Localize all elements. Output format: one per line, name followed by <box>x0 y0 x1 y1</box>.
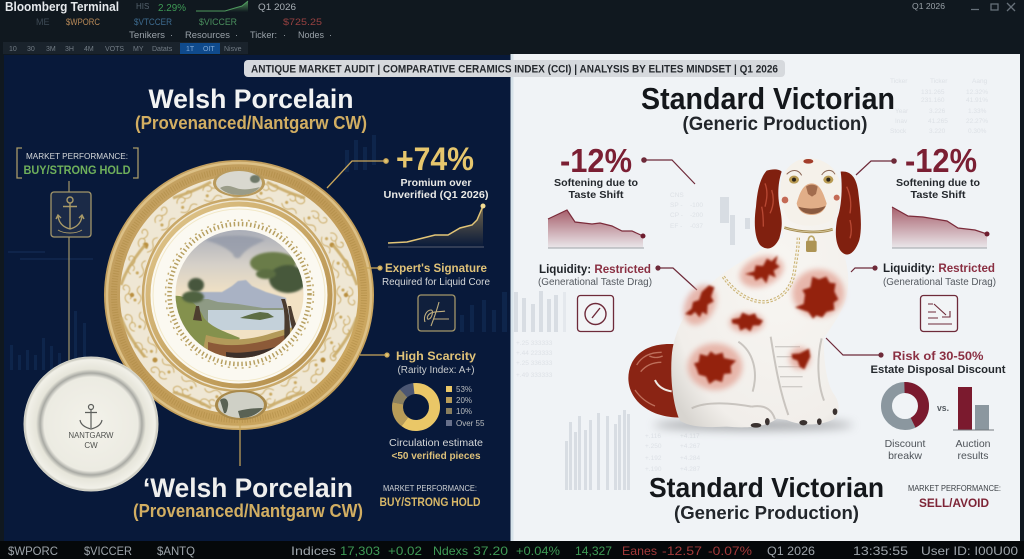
top bar: window title and tickers: Q1 2026 <box>258 2 296 13</box>
red patches <box>685 255 838 384</box>
top bar: window title and tickers: $VTCCER <box>134 17 172 27</box>
heading: Welsh Porcelain lower: (Provenanced/Nantgarw CW) <box>133 501 363 521</box>
bottom ticker bar: Ndexs <box>433 544 468 558</box>
donut chart: discount breakdown <box>886 388 924 424</box>
top bar: window title and tickers: · <box>170 30 173 40</box>
collar and padlock <box>784 228 833 232</box>
faint data table: EF - <box>670 223 682 230</box>
text: Expert's Signature <box>382 263 490 288</box>
bottom ticker bar: Q1 2026 <box>767 544 815 558</box>
faint data table: 41.265 <box>928 118 948 125</box>
donut legend: Over 55 <box>456 419 485 428</box>
market performance: buy lower: BUY/STRONG HOLD <box>380 495 481 509</box>
top bar: window title and tickers: Ticker: <box>250 30 277 40</box>
top bar: window title and tickers: 2.29% <box>158 3 186 14</box>
donut legend <box>446 385 485 428</box>
faint data table: Aang <box>972 78 988 85</box>
donut legend: 20% <box>456 396 472 405</box>
bottom ticker bar: -12.57 <box>662 544 702 558</box>
faint data table: +.190 <box>645 466 662 473</box>
connectors: dog left <box>642 158 697 290</box>
market performance box: buy: MARKET PERFORMANCE: <box>26 151 128 161</box>
faint data table: +.49 333333 <box>516 372 553 379</box>
stat: +74% premium: +74% <box>396 141 474 177</box>
top bar: window title and tickers: · <box>329 30 332 40</box>
tab row: OIT <box>203 46 215 53</box>
tab row: 3M <box>46 46 56 53</box>
icon: anchor <box>51 192 91 237</box>
bottom ticker bar: 17,303 <box>340 544 380 558</box>
tab row: Datats <box>152 46 173 53</box>
text: circulation estimate: Circulation estimate <box>389 437 483 449</box>
faint data table: +.44 223333 <box>516 350 553 357</box>
stat: -12% right: Taste Shift <box>910 189 966 201</box>
bottom ticker bar: User ID: I00U00 <box>921 544 1018 558</box>
text: risk of discount: Risk of 30-50% <box>892 349 984 363</box>
faint data table: +.25 336333 <box>516 360 553 367</box>
top bar: window title and tickers: $VICCER <box>199 17 237 27</box>
faint data table: +4.284 <box>680 455 700 462</box>
top bar: window title and tickers: · <box>283 30 286 40</box>
connector: plate to heading <box>239 421 241 466</box>
faint data table: SP - <box>670 202 683 209</box>
stat: -12% right: -12% <box>905 142 977 179</box>
head <box>780 158 840 226</box>
donut legend: 10% <box>456 407 472 416</box>
heading: Welsh Porcelain: Welsh Porcelain <box>148 84 354 114</box>
bottom ticker bar: $VICCER <box>84 544 132 558</box>
faint data table: +4.287 <box>680 466 700 473</box>
connectors: dog right <box>826 159 896 357</box>
text: risk of discount <box>870 349 1006 376</box>
heading: Welsh Porcelain lower: ‘Welsh Porcelain <box>143 473 353 503</box>
icon: anchor mark <box>80 404 102 429</box>
faint data table: 0.30% <box>968 128 987 135</box>
text: High Scarcity: (Rarity Index: A+) <box>398 365 474 376</box>
muzzle <box>782 183 840 215</box>
tail <box>628 344 683 418</box>
plate: Nantgarw porcelain <box>104 160 374 430</box>
faint data table: +.116 <box>645 433 661 440</box>
stat: -12% left: Taste Shift <box>568 189 624 201</box>
market performance: buy lower <box>380 483 481 509</box>
bottom ticker bar: Eanes <box>622 544 657 558</box>
panel: Standard Victorian <box>512 54 1020 541</box>
faint data table: Ticker <box>930 78 948 85</box>
faint data table: Ticker <box>890 78 908 85</box>
labels: donut and bars: Auction <box>955 438 991 450</box>
faint data table: 12.32% <box>966 89 988 96</box>
outer gold band <box>104 160 374 430</box>
text: High Scarcity: High Scarcity <box>396 349 476 363</box>
text: Expert's Signature: Expert's Signature <box>385 263 487 275</box>
faint data table: +.250 <box>645 443 662 450</box>
plate back: anchor mark: CW <box>84 441 98 450</box>
faint data table: Stock <box>890 128 907 135</box>
bar chart: auction results <box>953 387 994 430</box>
title strip: ANTIQUE MARKET AUDIT | COMPARATIVE CERAMICS INDEX (CCI) | ANALYSIS BY ELITES MINDSET | Q1 2026 <box>251 64 778 76</box>
window title: Bloomberg Terminal <box>5 0 119 14</box>
heading: Welsh Porcelain: (Provenanced/Nantgarw CW) <box>135 113 367 133</box>
dog figurine <box>628 158 861 430</box>
tab row <box>3 42 248 54</box>
gilt chain <box>723 237 798 302</box>
labels: donut and bars: breakw <box>888 450 922 462</box>
top bar: window title and tickers: ME <box>36 17 50 27</box>
faint data table: 22.27% <box>966 118 988 125</box>
stat: +74% premium: Promium over <box>400 177 472 189</box>
lace border <box>120 176 358 414</box>
bottom ticker bar: +0.04% <box>516 544 560 558</box>
area chart: softening right <box>892 207 990 248</box>
labels: donut and bars: results <box>958 450 988 462</box>
bottom ticker bar: $WPORC <box>8 544 58 558</box>
heading: Standard Victorian: Standard Victorian <box>641 81 895 116</box>
text: circulation estimate <box>389 437 483 462</box>
market performance: sell: MARKET PERFORMANCE: <box>908 484 1001 493</box>
tab row: 10 <box>9 46 17 53</box>
text: liquidity left: Liquidity: Restricted <box>539 264 651 276</box>
faint data table: 231.160 <box>921 97 945 104</box>
heading: Welsh Porcelain lower <box>133 473 363 521</box>
sparkline <box>196 1 248 12</box>
faint data table: +4.117 <box>680 433 700 440</box>
labels: donut and bars <box>885 438 991 462</box>
faint data table: -200 <box>690 212 703 219</box>
bottom ticker bar <box>0 541 1024 559</box>
market performance box: buy <box>17 148 138 178</box>
top bar: window title and tickers: Nodes <box>298 30 324 40</box>
tab row: 3H <box>65 46 74 53</box>
line chart: premium rise <box>388 204 486 247</box>
bottom ticker bar: 37.20 <box>473 544 508 558</box>
faint data table: 41.91% <box>966 97 988 104</box>
window controls <box>971 3 1015 11</box>
label: vs.: vs. <box>937 403 949 413</box>
market performance: buy lower: MARKET PERFORMANCE: <box>383 483 477 493</box>
top cartouche <box>213 169 265 197</box>
donut chart: rarity <box>396 387 436 427</box>
faint data table: +.192 <box>645 455 662 462</box>
heading: Standard Victorian <box>641 81 895 135</box>
market performance: sell <box>908 484 1001 510</box>
faint data table: +4.267 <box>680 443 700 450</box>
stat: +74% premium <box>384 141 488 201</box>
stat: -12% left <box>554 142 638 201</box>
top bar: window title and tickers: HIS <box>136 2 149 11</box>
labels: donut and bars: Discount <box>885 438 926 450</box>
stat: -12% left: Softening due to <box>554 177 638 189</box>
title strip <box>244 60 785 77</box>
painted landscape <box>176 230 304 358</box>
text: liquidity right: Liquidity: Restricted <box>883 263 995 275</box>
top bar: window title and tickers: $WPORC <box>66 17 100 27</box>
text: liquidity right: (Generational Taste Drag) <box>883 277 996 288</box>
text: circulation estimate: <50 verified pieces <box>392 450 481 462</box>
right ear <box>836 172 861 255</box>
faint data table: Year <box>895 108 909 115</box>
faint data table: -037 <box>690 223 703 230</box>
beaded ring <box>170 224 310 364</box>
text: liquidity left: (Generational Taste Drag) <box>538 277 652 288</box>
plate back: anchor mark: NANTGARW <box>68 431 114 440</box>
heading: Welsh Porcelain <box>135 84 367 133</box>
connector line: anchor column <box>68 181 70 362</box>
top bar: window title and tickers <box>3 0 1015 54</box>
bottom cartouche <box>215 390 267 420</box>
text: risk of discount: Estate Disposal Discount <box>870 364 1006 376</box>
bottom ticker bar: $ANTQ <box>157 544 195 558</box>
gilt ring <box>143 199 335 391</box>
connector: +74% <box>327 159 388 188</box>
bottom ticker bar: 13:35:55 <box>853 544 908 558</box>
faint data table: 131.265 <box>921 89 945 96</box>
bottom ticker bar: Indices <box>291 544 336 558</box>
faint data table: 1.33% <box>968 108 987 115</box>
faint background bars <box>514 197 750 490</box>
top bar: window title and tickers: Tenikers <box>129 30 166 40</box>
connector: signature <box>362 266 382 270</box>
faint data table <box>516 78 988 473</box>
top bar: window title and tickers: Q1 2026 <box>912 1 945 11</box>
tab row: MY <box>133 46 144 53</box>
heading: Standard Victorian lower: (Generic Production) <box>674 503 859 523</box>
icon: gauge <box>578 296 614 332</box>
tab row: VOTS <box>105 46 124 53</box>
tab row: Nisve <box>224 46 242 53</box>
market performance box: buy: BUY/STRONG HOLD <box>24 165 130 177</box>
faint background bars <box>10 135 507 370</box>
stat: -12% right <box>896 142 980 201</box>
leg shading <box>692 337 824 419</box>
icon: signature box <box>418 295 455 331</box>
tab row: 4M <box>84 46 94 53</box>
tab row: 30 <box>27 46 35 53</box>
left ear <box>755 169 782 248</box>
stat: +74% premium: Unverified (Q1 2026) <box>384 189 488 201</box>
heading: Standard Victorian: (Generic Production) <box>682 114 868 135</box>
body <box>671 158 848 427</box>
bottom ticker bar: 14,327 <box>575 544 612 558</box>
faint data table: +.25 333333 <box>516 340 553 347</box>
top bar: window title and tickers: Resources <box>185 30 231 40</box>
panel: Welsh Porcelain <box>4 55 512 541</box>
faint data table: Inav <box>895 118 908 125</box>
stat: -12% right: Softening due to <box>896 177 980 189</box>
faint data table: 3.220 <box>929 128 946 135</box>
top bar: window title and tickers: $725.25 <box>283 17 322 27</box>
icon: declining trend <box>920 296 958 332</box>
red patch halos <box>677 250 844 390</box>
plate back: anchor mark <box>24 357 158 491</box>
stat: -12% left: -12% <box>560 142 632 179</box>
head spot <box>803 159 813 164</box>
tab row: 1T <box>186 46 195 53</box>
donut legend: 53% <box>456 385 472 394</box>
text: liquidity left <box>538 264 652 288</box>
ground shadow <box>653 420 853 430</box>
top bar: window title and tickers: · <box>235 30 238 40</box>
area chart: softening left <box>548 210 646 248</box>
bottom ticker bar: +0.02 <box>388 544 422 558</box>
faint data table: CP - <box>670 212 683 219</box>
faint data table: 3.226 <box>929 108 946 115</box>
connector: scarcity <box>360 353 389 357</box>
brow and eyes <box>787 170 835 184</box>
text: High Scarcity <box>396 349 476 376</box>
text: liquidity right <box>883 263 996 288</box>
heading: Standard Victorian lower: Standard Victorian <box>649 472 884 503</box>
text: Expert's Signature: Required for Liquid Core <box>382 277 490 288</box>
paws <box>751 408 837 428</box>
market performance: sell: SELL/AVOID <box>919 496 989 510</box>
heading: Standard Victorian lower <box>649 472 884 523</box>
faint data table: CNS <box>670 192 684 199</box>
faint data table: -100 <box>690 202 703 209</box>
bottom ticker bar: -0.07% <box>708 544 752 558</box>
